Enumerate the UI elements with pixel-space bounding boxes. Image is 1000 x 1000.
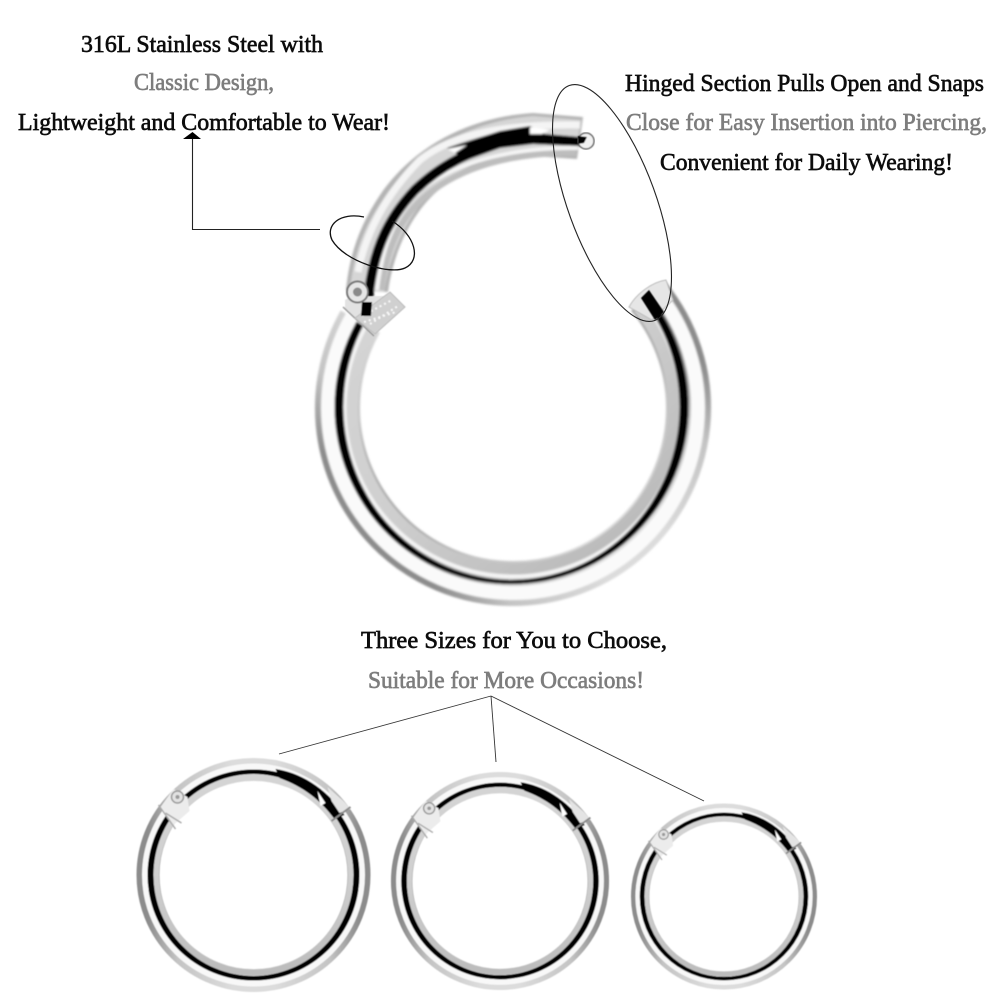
small ring: small size bbox=[638, 810, 810, 983]
hinge pin tip bbox=[578, 133, 594, 149]
text: sizes heading: Three Sizes for You to Choose, bbox=[361, 628, 667, 654]
ring cut end cap bbox=[629, 280, 673, 320]
text: hinged section heading: Close for Easy Insertion into Piercing, bbox=[626, 110, 987, 136]
small ring: medium size bbox=[399, 780, 601, 982]
text: steel material heading: 316L Stainless Steel with bbox=[81, 32, 323, 58]
text: hinged section heading bbox=[625, 71, 987, 176]
small ring: large size bbox=[145, 766, 362, 984]
text: hinged section heading: Convenient for Daily Wearing! bbox=[660, 150, 953, 176]
text: steel material heading: Classic Design, bbox=[134, 70, 274, 96]
text: sizes heading bbox=[361, 628, 667, 694]
ring body: opened upper arm bbox=[346, 113, 583, 312]
callout ellipse: small tube section bbox=[330, 216, 414, 270]
large hinged ring bbox=[314, 112, 712, 607]
hinge joint bbox=[343, 282, 405, 336]
arrow: connector to material heading bbox=[183, 132, 320, 230]
text: sizes heading: Suitable for More Occasions! bbox=[368, 668, 644, 694]
callout ellipse: hinged section bbox=[528, 70, 696, 336]
connector lines to three rings bbox=[279, 696, 704, 801]
text: steel material heading bbox=[18, 32, 390, 136]
text: hinged section heading: Hinged Section Pulls Open and Snaps bbox=[625, 71, 984, 97]
text: steel material heading: Lightweight and Comfortable to Wear! bbox=[18, 110, 390, 136]
black band at cut end bbox=[641, 290, 664, 320]
ring body: lower section bbox=[314, 282, 712, 607]
